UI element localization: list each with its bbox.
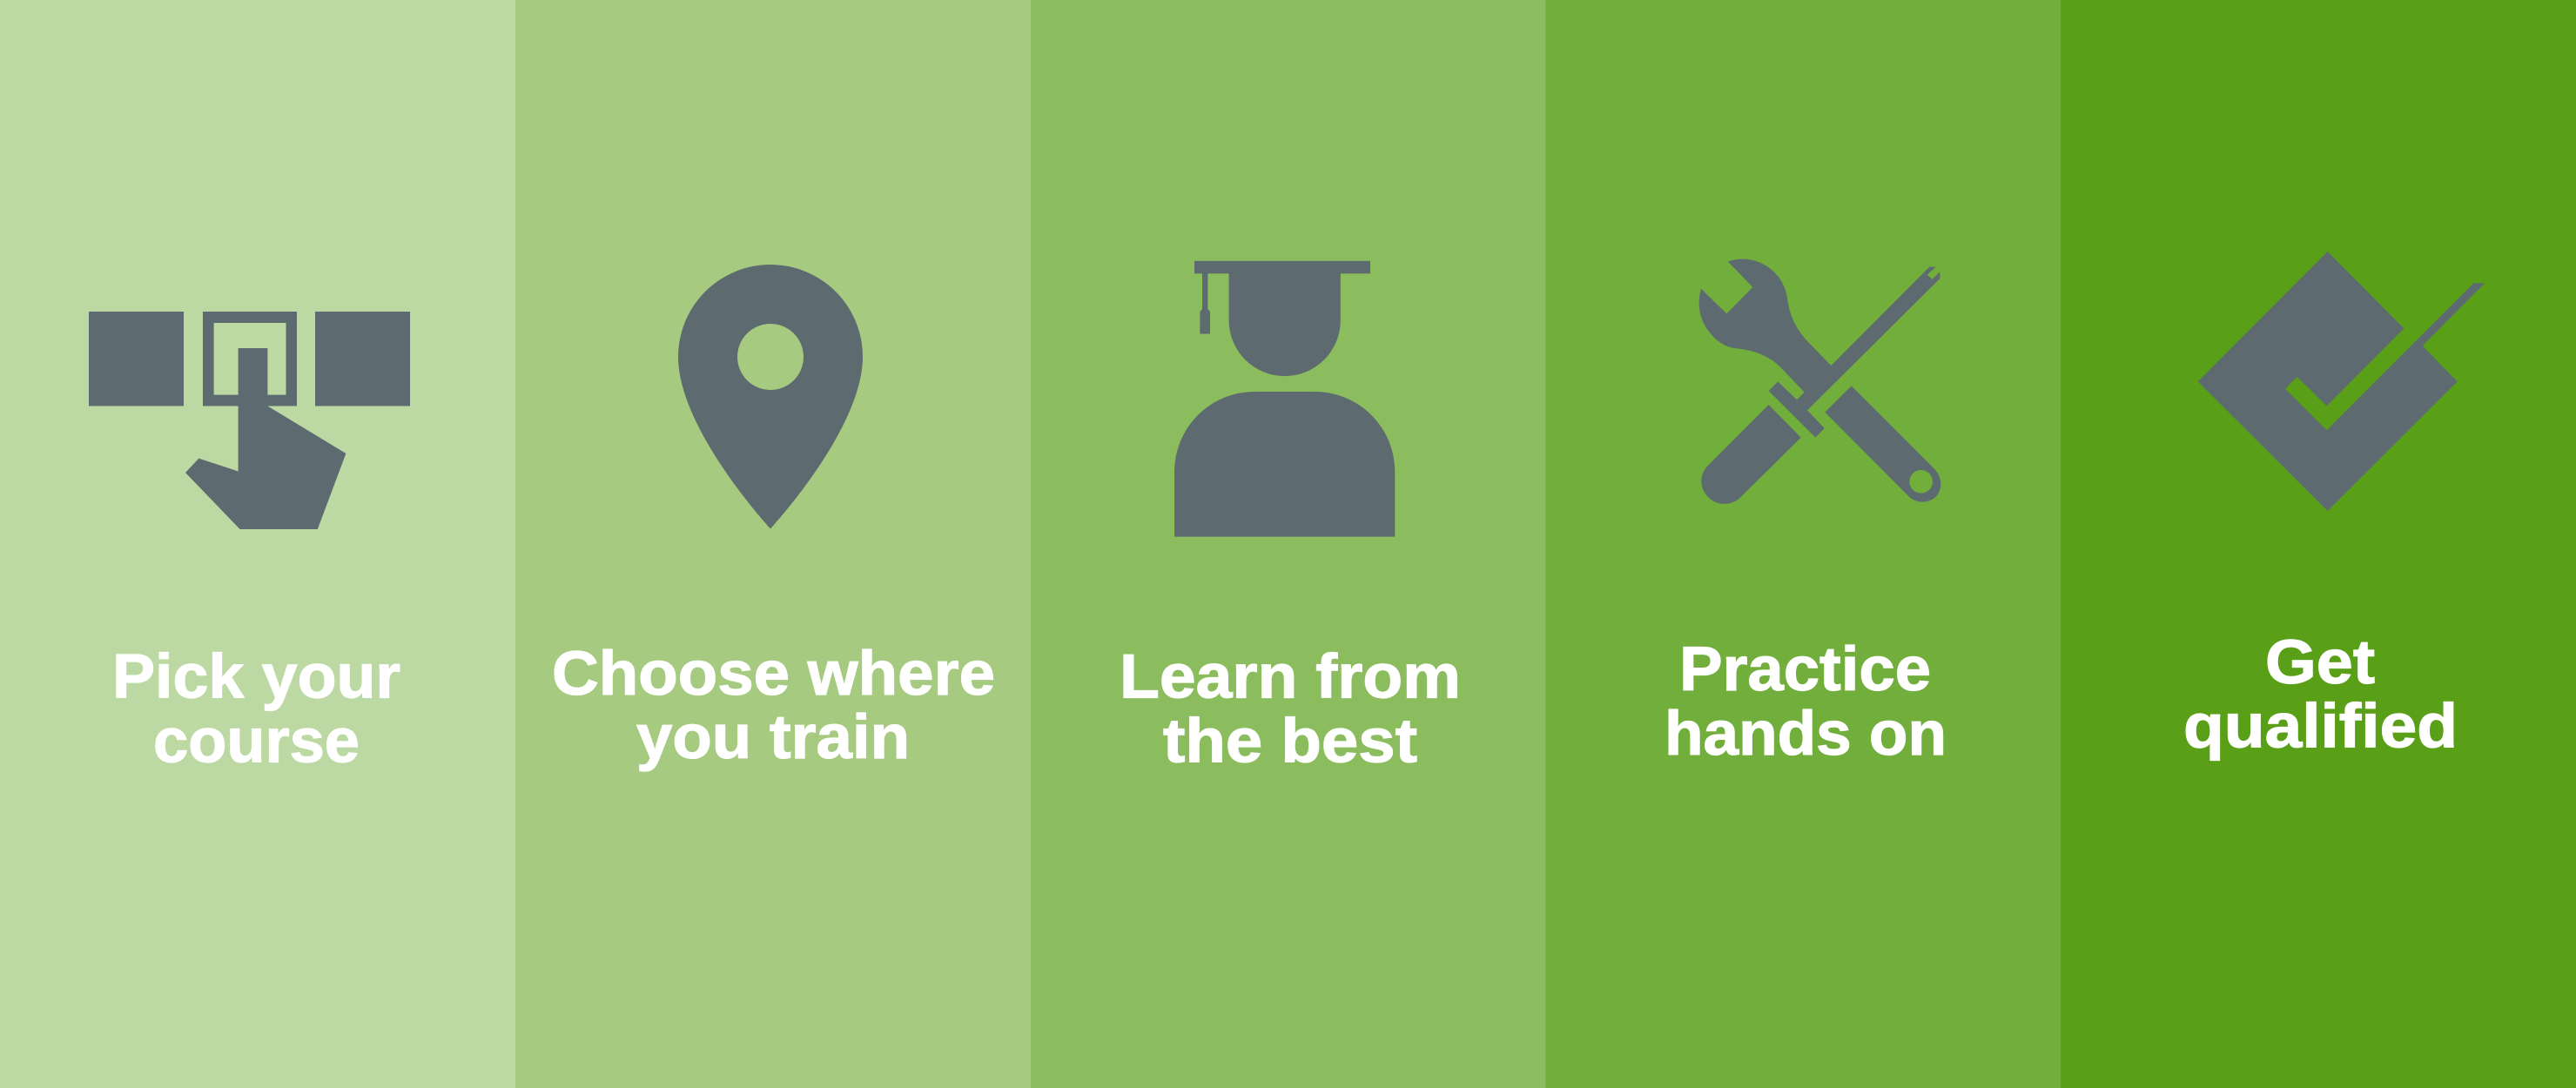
heading: practice hands on: hands on	[1665, 700, 1947, 769]
heading: pick your course: Pick your	[112, 642, 400, 712]
heading: practice hands on: Practice	[1679, 635, 1931, 704]
icon: graduate with mortarboard	[1174, 261, 1395, 537]
panel: practice hands on	[1546, 0, 2061, 1088]
heading: choose where you train: you train	[636, 703, 910, 772]
heading: get qualified	[2183, 628, 2458, 762]
heading: choose where you train: Choose where	[552, 640, 995, 709]
panel: get qualified	[2061, 0, 2576, 1088]
panel background: step 1	[0, 0, 515, 1088]
panel: choose where you train	[515, 0, 1031, 1088]
panel background: step 4	[1546, 0, 2061, 1088]
heading: learn from the best: the best	[1163, 707, 1417, 776]
heading: learn from the best: Learn from	[1120, 642, 1461, 712]
heading: get qualified: qualified	[2183, 693, 2458, 762]
icon: map pin	[678, 265, 863, 528]
heading: practice hands on	[1665, 635, 1947, 769]
heading: learn from the best	[1120, 642, 1461, 776]
icon: hand selecting a square	[89, 312, 410, 529]
panel: learn from the best	[1031, 0, 1546, 1088]
icon: diamond with check mark	[2198, 252, 2485, 511]
panel background: step 3	[1031, 0, 1546, 1088]
heading: pick your course: course	[153, 707, 360, 776]
heading: get qualified: Get	[2265, 628, 2375, 697]
panel: pick your course	[0, 0, 515, 1088]
panel background: step 2	[515, 0, 1031, 1088]
icon: crossed wrench and screwdriver	[1699, 259, 1940, 504]
panel background: step 5	[2061, 0, 2576, 1088]
heading: choose where you train	[552, 640, 995, 772]
heading: pick your course	[112, 642, 400, 776]
